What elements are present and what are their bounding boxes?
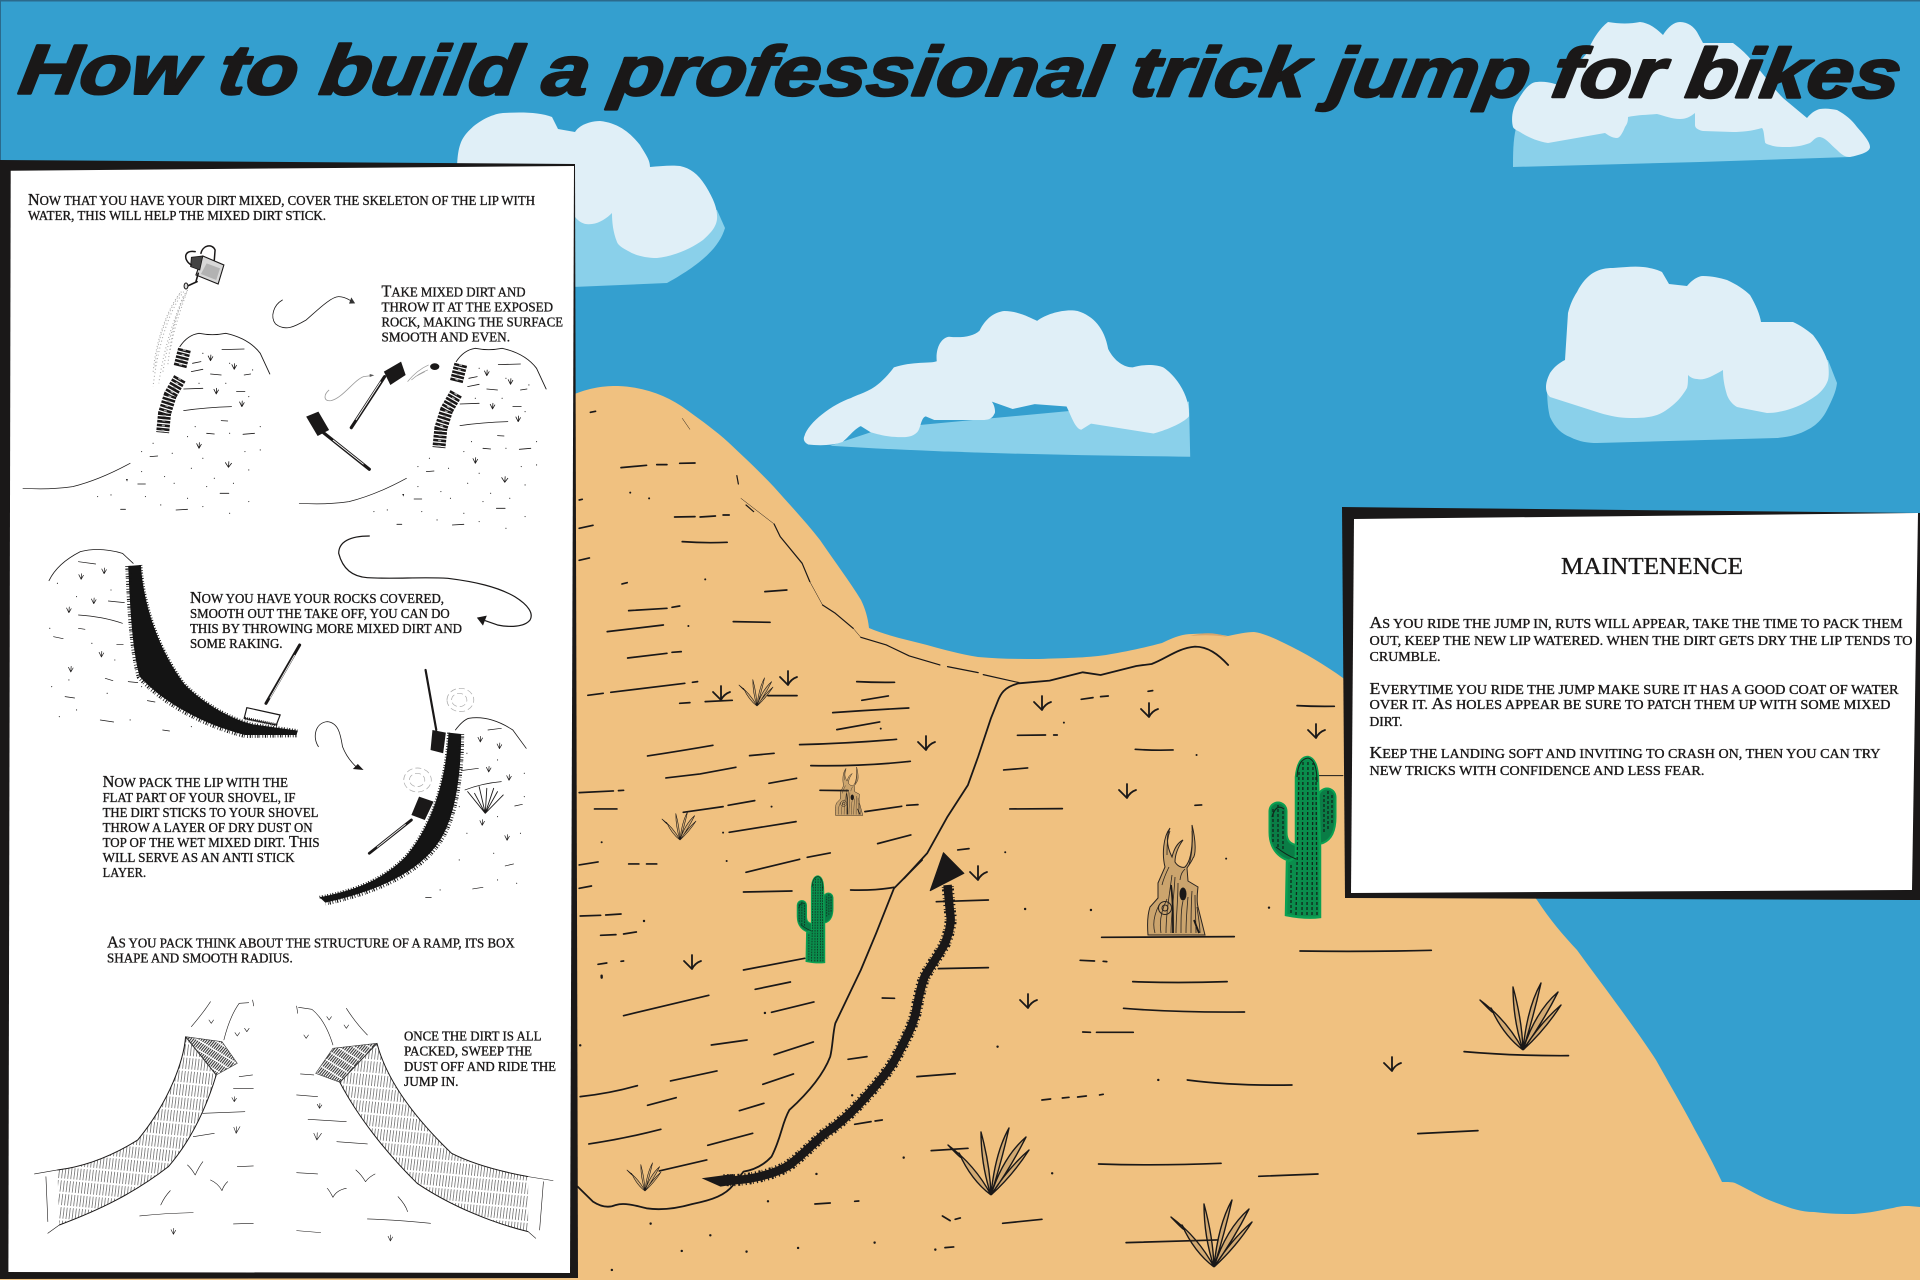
panel: build steps (0, 160, 578, 1279)
text: step 4 pack: WILL SERVE AS AN ANTI STICK (103, 850, 295, 865)
text: step 5 ramp structure: SHAPE AND SMOOTH RADIUS. (107, 951, 293, 966)
text: step 3 smooth: SMOOTH OUT THE TAKE OFF, YOU CAN DO (190, 606, 450, 621)
text: step 4 pack: NOW PACK THE LIP WITH THE (103, 772, 288, 791)
text: maintenance paragraphs: DIRT. (1370, 714, 1402, 729)
icon: shovels throwing dirt (306, 362, 439, 469)
icon: small stump (835, 767, 863, 815)
text: maintenance paragraphs: EVERYTIME YOU RIDE THE JUMP MAKE SURE IT HAS A GOOD COAT OF WATER (1370, 679, 1899, 698)
text: step 6 sweep: PACKED, SWEEP THE (404, 1044, 532, 1059)
icon: watering can (153, 246, 224, 387)
heading: maintenence: MAINTENENCE (1561, 554, 1743, 580)
text: step 4 pack: THROW A LAYER OF DRY DUST ON (103, 820, 313, 835)
text: maintenance paragraphs: NEW TRICKS WITH CONFIDENCE AND LESS FEAR. (1370, 763, 1704, 778)
text: maintenance paragraphs: AS YOU RIDE THE JUMP IN, RUTS WILL APPEAR, TAKE THE TIME TO PACK THEM (1370, 613, 1902, 632)
sprouts (684, 671, 1401, 1071)
text: step 6 sweep: DUST OFF AND RIDE THE (404, 1059, 556, 1074)
illustration: first mound (23, 333, 270, 513)
text: step 6 sweep (404, 1029, 556, 1089)
sand bump on ridge (1190, 633, 1228, 637)
text: maintenance paragraphs: CRUMBLE. (1370, 649, 1440, 664)
illustration: packing the lip with shovels (320, 670, 526, 903)
text: step 3 smooth (190, 588, 462, 651)
text: step 4 pack: FLAT PART OF YOUR SHOVEL, IF (103, 790, 296, 805)
text: step 2 throw (382, 282, 563, 345)
text: step 3 smooth: NOW YOU HAVE YOUR ROCKS COVERED, (190, 588, 444, 607)
text: step 2 throw: SMOOTH AND EVEN. (382, 330, 510, 345)
icon: large stump (1148, 825, 1205, 935)
text: step 5 ramp structure (107, 933, 515, 966)
cloud: middle (804, 310, 1190, 457)
land: sand hill (0, 386, 1920, 1280)
illustration: right finished ramp (297, 1006, 553, 1241)
grass tufts (627, 678, 1561, 1267)
ground texture strokes upper (579, 411, 1343, 878)
ground texture strokes lower (578, 860, 1318, 1270)
text: step 2 throw: THROW IT AT THE EXPOSED (382, 300, 553, 315)
panel frame (0, 160, 578, 1279)
dots (602, 493, 1226, 861)
trail line (904, 647, 1228, 878)
text: step 3 smooth: THIS BY THROWING MORE MIXED DIRT AND (190, 621, 462, 636)
text: step 4 pack: TOP OF THE WET MIXED DIRT. THIS (103, 832, 320, 851)
text: step 4 pack: LAYER. (103, 865, 146, 880)
text: step 2 throw: TAKE MIXED DIRT AND (382, 282, 526, 301)
cloud: top right (1512, 22, 1870, 167)
text: maintenance paragraphs: OVER IT. AS HOLES APPEAR BE SURE TO PATCH THEM UP WITH SOME MIXED (1370, 694, 1891, 713)
text: step 2 throw: ROCK, MAKING THE SURFACE (382, 315, 563, 330)
text: step 4 pack (103, 772, 320, 880)
text: maintenance paragraphs: KEEP THE LANDING SOFT AND INVITING TO CRASH ON, THEN YOU CAN TRY (1370, 743, 1881, 762)
dashed ridge line (737, 476, 1019, 683)
text: maintenance paragraphs (1370, 613, 1913, 778)
illustration: left finished ramp (34, 1000, 254, 1234)
text: maintenance paragraphs: OUT, KEEP THE NEW LIP WATERED. WHEN THE DIRT GETS DRY THE LIP TENDS TO (1370, 633, 1913, 648)
text: step 3 smooth: SOME RAKING. (190, 636, 282, 651)
text: step 1 water (28, 190, 535, 223)
text: step 5 ramp structure: AS YOU PACK THINK ABOUT THE STRUCTURE OF A RAMP, ITS BOX (107, 933, 515, 952)
illustration: second mound (299, 348, 546, 528)
panel: maintenance (1342, 507, 1920, 900)
arrow: to step 4 (315, 722, 364, 770)
text: step 6 sweep: ONCE THE DIRT IS ALL (404, 1029, 542, 1044)
icon: large cactus (1272, 757, 1332, 918)
title: How to build a professional trick jump for bikes (15, 30, 1907, 113)
text: step 6 sweep: JUMP IN. (404, 1074, 458, 1089)
ground texture strokes right (1300, 950, 1568, 1134)
arrow: long arrow to step 3 (339, 536, 531, 626)
panel frame (1342, 507, 1920, 900)
clouds (457, 22, 1870, 457)
illustration: covered take off with rake (49, 550, 300, 735)
trail line lower (578, 860, 922, 1209)
icon: small cactus (799, 876, 831, 963)
cloud: behind left panel (457, 112, 725, 287)
cloud: right (1546, 267, 1837, 443)
arrow: big brush arrow up the jump (702, 853, 964, 1187)
text: step 4 pack: THE DIRT STICKS TO YOUR SHOVEL (103, 805, 318, 820)
text: step 1 water: NOW THAT YOU HAVE YOUR DIRT MIXED, COVER THE SKELETON OF THE LIP WITH (28, 190, 535, 209)
text: step 1 water: WATER, THIS WILL HELP THE MIXED DIRT STICK. (28, 208, 326, 223)
arrow: step 1 to 2 (273, 297, 355, 328)
